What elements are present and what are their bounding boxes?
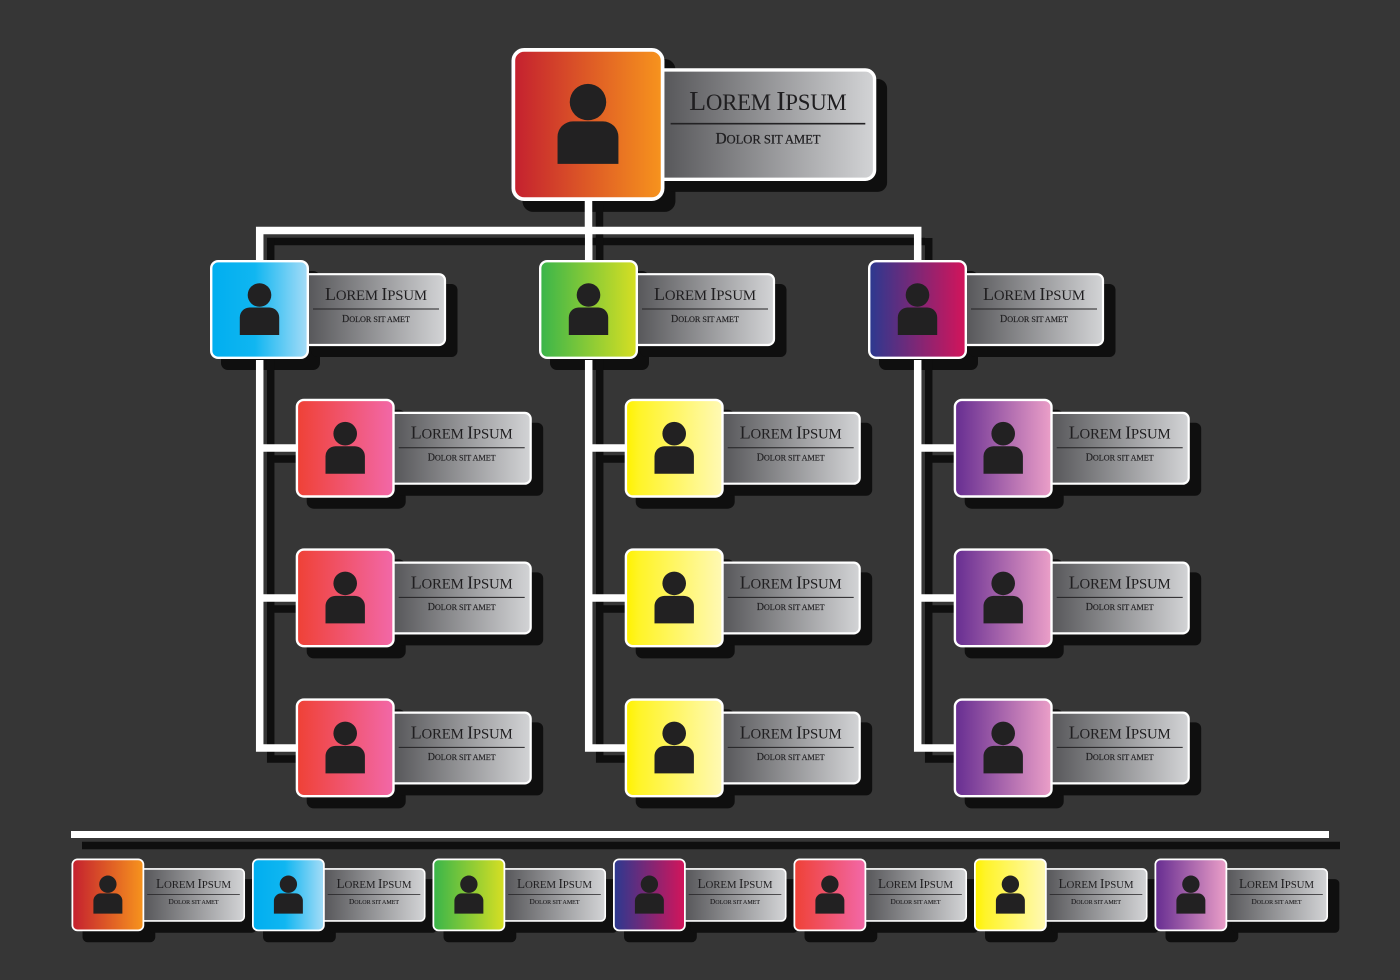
legend card: navy-crimson [614, 859, 786, 930]
card: yellow report 1: LOREM IPSUM [740, 423, 842, 443]
card: yellow report 1 [626, 400, 860, 496]
legend card: green: LOREM IPSUM [517, 876, 592, 891]
legend card: yellow [975, 859, 1147, 930]
card: blue manager: DOLOR SIT AMET [342, 314, 410, 325]
legend card: purple [1155, 859, 1327, 930]
legend card: navy-crimson: DOLOR SIT AMET [710, 897, 760, 906]
card: yellow report 3: LOREM IPSUM [740, 722, 842, 742]
card: purple report 3: LOREM IPSUM [1069, 722, 1171, 742]
legend card: orange: LOREM IPSUM [156, 876, 231, 891]
card: red report 3: LOREM IPSUM [411, 722, 513, 742]
card: purple report 1 [955, 400, 1189, 496]
org chart connector lines [260, 198, 960, 748]
card: purple report 3 [955, 700, 1189, 796]
card: blue manager: LOREM IPSUM [325, 284, 427, 304]
card: green manager: LOREM IPSUM [654, 284, 756, 304]
legend card: blue: DOLOR SIT AMET [349, 897, 399, 906]
legend card: purple: DOLOR SIT AMET [1252, 897, 1302, 906]
legend card: red: DOLOR SIT AMET [891, 897, 941, 906]
card: yellow report 2 [626, 550, 860, 646]
card: purple report 1: LOREM IPSUM [1069, 423, 1171, 443]
card: red report 3: DOLOR SIT AMET [428, 752, 496, 763]
card: navy-crimson manager [869, 261, 1103, 358]
card: yellow report 2: LOREM IPSUM [740, 572, 842, 592]
legend card: orange [72, 859, 244, 930]
card: red report 1 [297, 400, 531, 496]
card: red report 1: DOLOR SIT AMET [428, 453, 496, 464]
card: purple report 1: DOLOR SIT AMET [1086, 453, 1154, 464]
legend card: yellow: DOLOR SIT AMET [1071, 897, 1121, 906]
legend card: green: DOLOR SIT AMET [530, 897, 580, 906]
legend card: green [433, 859, 605, 930]
legend card: blue [253, 859, 425, 930]
legend card: blue: LOREM IPSUM [337, 876, 412, 891]
card: purple report 2 [955, 550, 1189, 646]
top card: orange [513, 50, 875, 199]
card: green manager: DOLOR SIT AMET [671, 314, 739, 325]
card: red report 2: LOREM IPSUM [411, 572, 513, 592]
card: green manager [540, 261, 774, 358]
card: red report 2 [297, 550, 531, 646]
card: yellow report 3 [626, 700, 860, 796]
divider line [71, 831, 1329, 838]
legend card: purple: LOREM IPSUM [1239, 876, 1314, 891]
connector shadows [82, 205, 1340, 846]
card: red report 1: LOREM IPSUM [411, 423, 513, 443]
top card: orange: LOREM IPSUM [689, 86, 847, 117]
card: purple report 2: DOLOR SIT AMET [1086, 602, 1154, 613]
card: yellow report 1: DOLOR SIT AMET [757, 453, 825, 464]
legend card: red: LOREM IPSUM [878, 876, 953, 891]
top card: orange: DOLOR SIT AMET [715, 130, 821, 147]
card: blue manager [211, 261, 445, 358]
card: purple report 3: DOLOR SIT AMET [1086, 752, 1154, 763]
legend card: navy-crimson: LOREM IPSUM [698, 876, 773, 891]
card: navy-crimson manager: LOREM IPSUM [983, 284, 1085, 304]
legend card: orange: DOLOR SIT AMET [169, 897, 219, 906]
card: purple report 2: LOREM IPSUM [1069, 572, 1171, 592]
card: red report 2: DOLOR SIT AMET [428, 602, 496, 613]
card: yellow report 3: DOLOR SIT AMET [757, 752, 825, 763]
card: navy-crimson manager: DOLOR SIT AMET [1000, 314, 1068, 325]
card: red report 3 [297, 700, 531, 796]
legend card: yellow: LOREM IPSUM [1059, 876, 1134, 891]
card: yellow report 2: DOLOR SIT AMET [757, 602, 825, 613]
legend card: red [794, 859, 966, 930]
